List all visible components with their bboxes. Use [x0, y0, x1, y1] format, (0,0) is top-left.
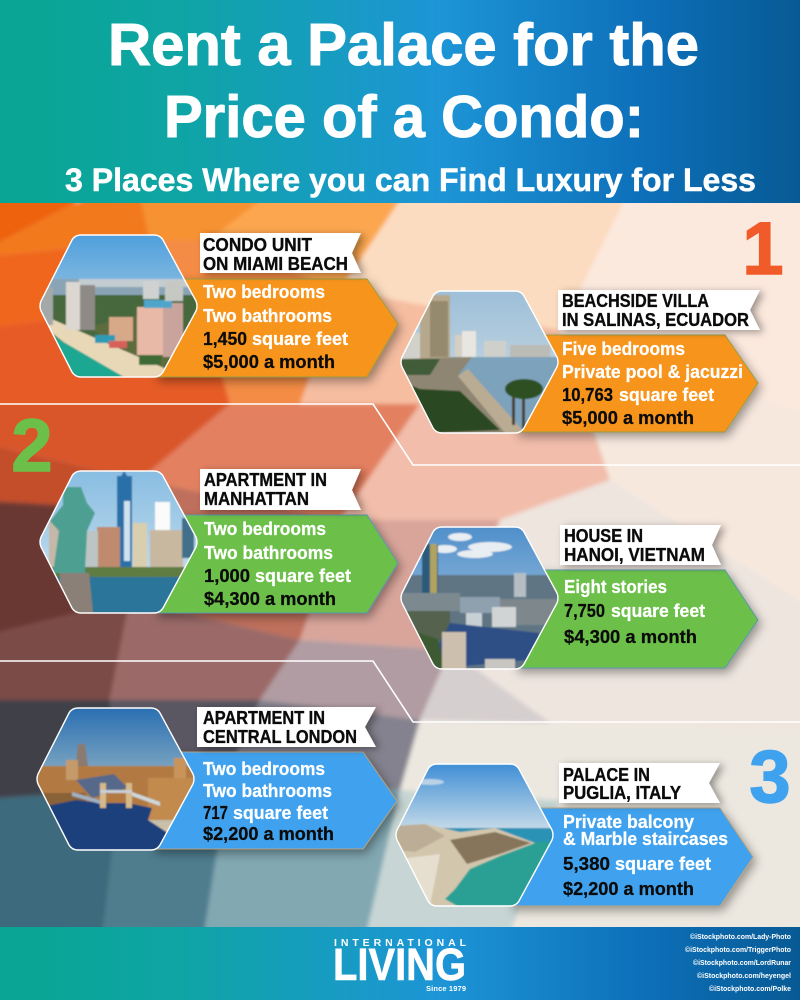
specs	[203, 759, 334, 844]
arrow banner	[515, 335, 758, 432]
specs: Two bedrooms	[203, 759, 325, 779]
specs: $4,300 a month	[564, 627, 697, 647]
arrow banner	[515, 570, 758, 668]
label: CENTRAL LONDON	[203, 726, 357, 747]
logo: International Living: Since 1979	[426, 984, 466, 993]
label	[197, 707, 376, 747]
label: APARTMENT IN	[203, 707, 325, 728]
label	[558, 290, 760, 330]
photo: London	[36, 708, 195, 850]
specs: $2,200 a month	[203, 824, 334, 844]
number 1: 1	[742, 207, 784, 290]
footer band	[0, 927, 800, 1000]
arrow banner	[510, 808, 753, 906]
specs: Two bedrooms	[203, 282, 325, 302]
title line 2: Price of a Condo:	[164, 84, 644, 150]
specs: Two bathrooms	[203, 306, 332, 326]
label	[200, 233, 361, 274]
specs: Eight stories	[564, 577, 667, 597]
specs: square feet	[255, 566, 351, 586]
specs: 717	[203, 803, 228, 823]
photo credits	[685, 932, 791, 993]
specs: square feet	[611, 601, 705, 621]
specs	[203, 282, 348, 372]
label	[560, 525, 721, 565]
label: MANHATTAN	[204, 488, 309, 509]
label: APARTMENT IN	[204, 469, 327, 490]
specs: square feet	[619, 385, 714, 405]
specs: $4,300 a month	[204, 589, 336, 609]
photo credits: ©iStockphoto.com/TriggerPhoto	[685, 945, 791, 954]
specs: Two bathrooms	[203, 781, 332, 801]
specs: square feet	[615, 854, 711, 874]
photo credits: ©iStockphoto.com/LordRunar	[693, 958, 791, 967]
specs: Private balcony	[563, 812, 694, 832]
specs: 1,000	[204, 566, 250, 586]
arrow banner	[152, 752, 397, 849]
specs: Five bedrooms	[562, 339, 685, 359]
label: BEACHSIDE VILLA	[562, 290, 709, 311]
specs	[562, 339, 743, 428]
number 3: 3	[749, 735, 791, 818]
specs: $5,000 a month	[562, 408, 694, 428]
specs: 10,763	[562, 385, 613, 405]
arrow banner	[155, 515, 398, 613]
specs: $2,200 a month	[563, 879, 694, 899]
title line 1: Rent a Palace for the	[108, 12, 699, 78]
specs: Private pool & jacuzzi	[562, 362, 743, 382]
photo credits: ©iStockphoto.com/Polke	[709, 984, 791, 993]
specs: square feet	[233, 803, 328, 823]
panel: condo unit on Miami Beach	[39, 233, 398, 377]
specs	[204, 519, 351, 609]
photo credits: ©iStockphoto.com/heyengel	[697, 971, 791, 980]
specs	[563, 812, 728, 899]
label: PALACE IN	[563, 764, 650, 785]
photo: Hanoi	[400, 527, 559, 669]
divider line 1	[0, 404, 800, 465]
photo: Puglia	[395, 764, 554, 906]
label: IN SALINAS, ECUADOR	[562, 309, 749, 330]
photo: Manhattan	[39, 471, 198, 613]
photo: Salinas	[400, 291, 559, 433]
panel: apartment in Manhattan	[39, 469, 398, 613]
specs	[564, 577, 705, 647]
logo: International Living: INTERNATIONAL	[334, 937, 467, 949]
label: PUGLIA, ITALY	[563, 782, 682, 803]
panel: apartment in central London	[36, 707, 397, 850]
specs: & Marble staircases	[563, 829, 728, 849]
background: low-poly facets	[0, 170, 800, 960]
panel: beachside villa in Salinas, Ecuador	[400, 290, 760, 433]
specs: $5,000 a month	[203, 352, 335, 372]
panel: house in Hanoi, Vietnam	[400, 525, 758, 669]
specs: 7,750	[564, 601, 605, 621]
arrow banner	[155, 279, 398, 377]
specs: square feet	[252, 329, 348, 349]
label: ON MIAMI BEACH	[203, 253, 348, 274]
label: CONDO UNIT	[203, 234, 313, 255]
header band	[0, 0, 800, 203]
label: HOUSE IN	[564, 525, 643, 546]
panel: palace in Puglia, Italy	[395, 763, 753, 906]
photo: Miami Beach	[39, 235, 198, 377]
label	[559, 763, 720, 803]
label: HANOI, VIETNAM	[564, 544, 705, 565]
specs: Two bathrooms	[204, 543, 333, 563]
specs: 5,380	[563, 854, 610, 874]
label	[200, 469, 361, 510]
divider line 2	[0, 661, 800, 722]
subtitle: 3 Places Where you can Find Luxury for Less	[65, 162, 756, 198]
photo credits: ©iStockphoto.com/Lady-Photo	[690, 932, 791, 941]
logo: International Living: LIVING	[333, 939, 466, 990]
specs: Two bedrooms	[204, 519, 326, 539]
number 2: 2	[11, 404, 53, 487]
specs: 1,450	[203, 329, 247, 349]
